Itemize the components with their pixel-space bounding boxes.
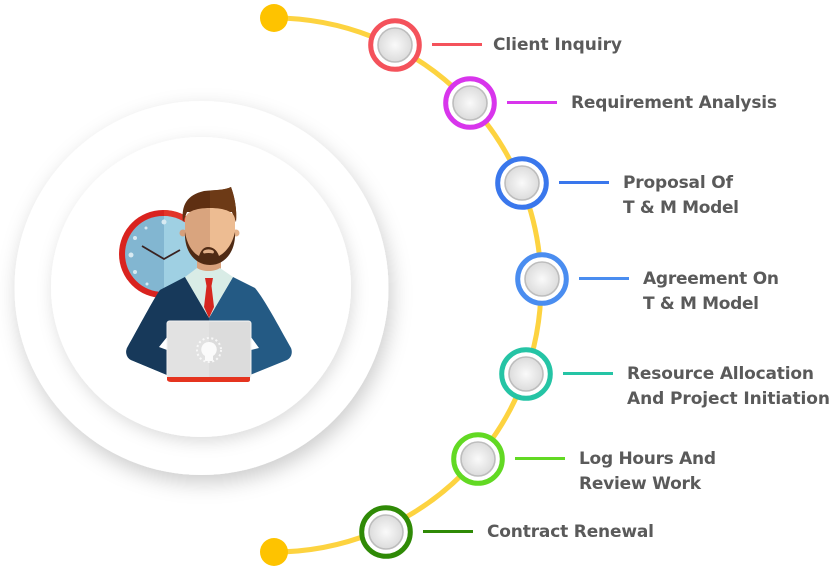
step 5: resource allocation and project initiation: Resource Allocation xyxy=(627,364,814,384)
step 4: agreement on T&M model: Agreement On xyxy=(643,269,779,289)
icon: hair xyxy=(183,187,236,222)
step 2: requirement analysis xyxy=(446,79,777,127)
step 3: proposal of T&M model: T & M Model xyxy=(623,198,739,218)
icon: red tie xyxy=(204,278,214,318)
icon: shirt cuffs xyxy=(159,337,259,350)
step 6: log hours and review work xyxy=(454,435,716,494)
step 2: requirement analysis: Requirement Analysis xyxy=(571,93,777,113)
arc end dot xyxy=(260,538,288,566)
icon: laptop xyxy=(167,321,251,382)
step 6: log hours and review work: Log Hours And xyxy=(579,449,716,469)
timeline arc xyxy=(274,18,541,552)
step 5: resource allocation and project initiation: And Project Initiation xyxy=(627,389,830,409)
step 6: log hours and review work: Review Work xyxy=(579,474,702,494)
step 7: contract renewal: Contract Renewal xyxy=(487,522,654,542)
illustration: man with laptop and clock xyxy=(119,187,292,382)
step 1: client inquiry: Client Inquiry xyxy=(493,35,622,55)
step 3: proposal of T&M model xyxy=(498,159,739,218)
arc start dot xyxy=(260,4,288,32)
step 7: contract renewal xyxy=(362,508,654,556)
step 3: proposal of T&M model: Proposal Of xyxy=(623,173,734,193)
step 4: agreement on T&M model xyxy=(518,255,779,314)
outer white circle xyxy=(14,101,388,475)
inner white circle xyxy=(51,137,351,437)
step 4: agreement on T&M model: T & M Model xyxy=(643,294,759,314)
icon: beard xyxy=(185,232,235,265)
step 5: resource allocation and project initiation xyxy=(502,350,830,409)
step 1: client inquiry xyxy=(371,21,622,69)
icon: jacket xyxy=(126,277,292,375)
icon: face xyxy=(185,208,210,264)
icon: wall clock xyxy=(119,210,208,298)
icon: shirt xyxy=(185,268,233,318)
icon: man neck and ears xyxy=(197,258,221,280)
